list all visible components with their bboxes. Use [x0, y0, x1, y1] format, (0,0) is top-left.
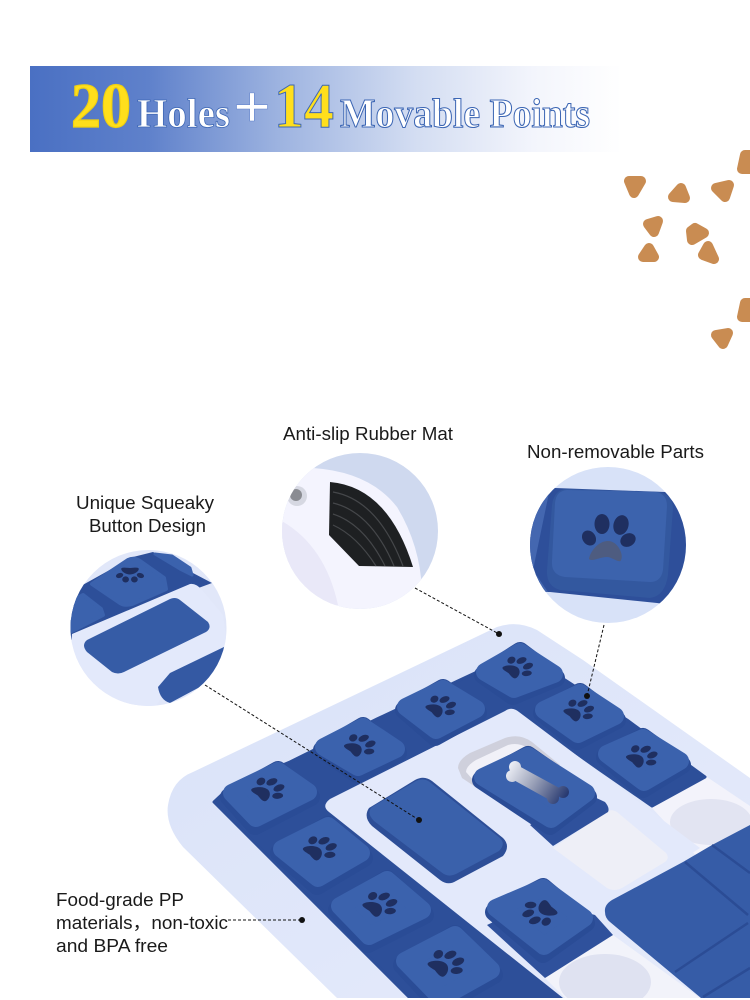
key bevel — [547, 489, 673, 598]
board body — [168, 624, 750, 998]
paw key — [279, 825, 364, 886]
squeaky button — [367, 778, 507, 883]
white foot — [280, 468, 422, 611]
lower key detail — [158, 645, 228, 703]
blue key tray — [214, 652, 705, 998]
bone key well — [458, 736, 560, 790]
white plate — [72, 584, 200, 640]
large paw icon — [579, 513, 638, 561]
paw key — [494, 887, 586, 954]
label: squeaky button design: Unique Squeaky — [76, 493, 214, 513]
title text: 14 — [274, 71, 334, 141]
leader line: rubber mat — [415, 588, 502, 637]
label: squeaky button design: Button Design — [89, 516, 206, 536]
kibble pieces — [629, 155, 750, 344]
paw key — [402, 934, 494, 1000]
lighter left strip — [530, 494, 549, 592]
callout circle: rubber mat — [280, 451, 440, 611]
callout circle: non-removable key — [530, 467, 686, 623]
bone key — [481, 755, 609, 846]
bottom food well — [545, 935, 700, 1000]
blue tray — [70, 552, 212, 640]
rectangular food well — [553, 810, 668, 890]
bone key well inner — [466, 744, 525, 778]
paw key — [404, 688, 478, 737]
label: non-removable parts: Non-removable Parts — [527, 442, 704, 462]
title text: Movable Points — [340, 90, 590, 136]
label: food-grade materials: Food-grade PP — [56, 890, 184, 910]
paw key — [483, 651, 556, 696]
label: anti-slip rubber mat: Anti-slip Rubber Mat — [283, 424, 453, 444]
black rubber pad — [329, 482, 413, 567]
right food well — [652, 777, 750, 860]
squeaky button detail — [84, 598, 210, 674]
small left key — [65, 595, 103, 631]
title banner — [30, 66, 622, 152]
paw key — [542, 692, 617, 741]
paw key — [337, 879, 425, 944]
inner white plate — [325, 709, 700, 998]
title text: + — [233, 74, 271, 140]
key face — [552, 490, 667, 582]
callout circle: squeaky button — [65, 549, 228, 707]
dark blue surround — [530, 488, 686, 604]
label: squeaky button design — [76, 493, 214, 536]
leader line: non-removable parts — [584, 625, 604, 699]
label: food-grade materials: and BPA free — [56, 936, 168, 956]
label: food-grade materials — [56, 890, 228, 956]
paw key detail — [92, 559, 166, 605]
bottom paw key tray — [487, 914, 613, 978]
screw — [287, 486, 307, 506]
small upper key — [155, 554, 192, 575]
title text: Holes — [137, 90, 230, 136]
paw key — [229, 770, 311, 826]
label: food-grade materials: materials，non-toxic — [56, 913, 228, 933]
leader line: squeaky button — [205, 685, 422, 823]
leader line: food-grade materials — [228, 917, 305, 923]
blue sliding panel — [605, 825, 750, 998]
title text: 20 — [71, 71, 131, 141]
title text — [71, 71, 590, 141]
puzzle board — [168, 624, 750, 1000]
paw key — [605, 737, 682, 789]
paw key — [322, 726, 398, 774]
curved body shadow — [282, 522, 338, 605]
